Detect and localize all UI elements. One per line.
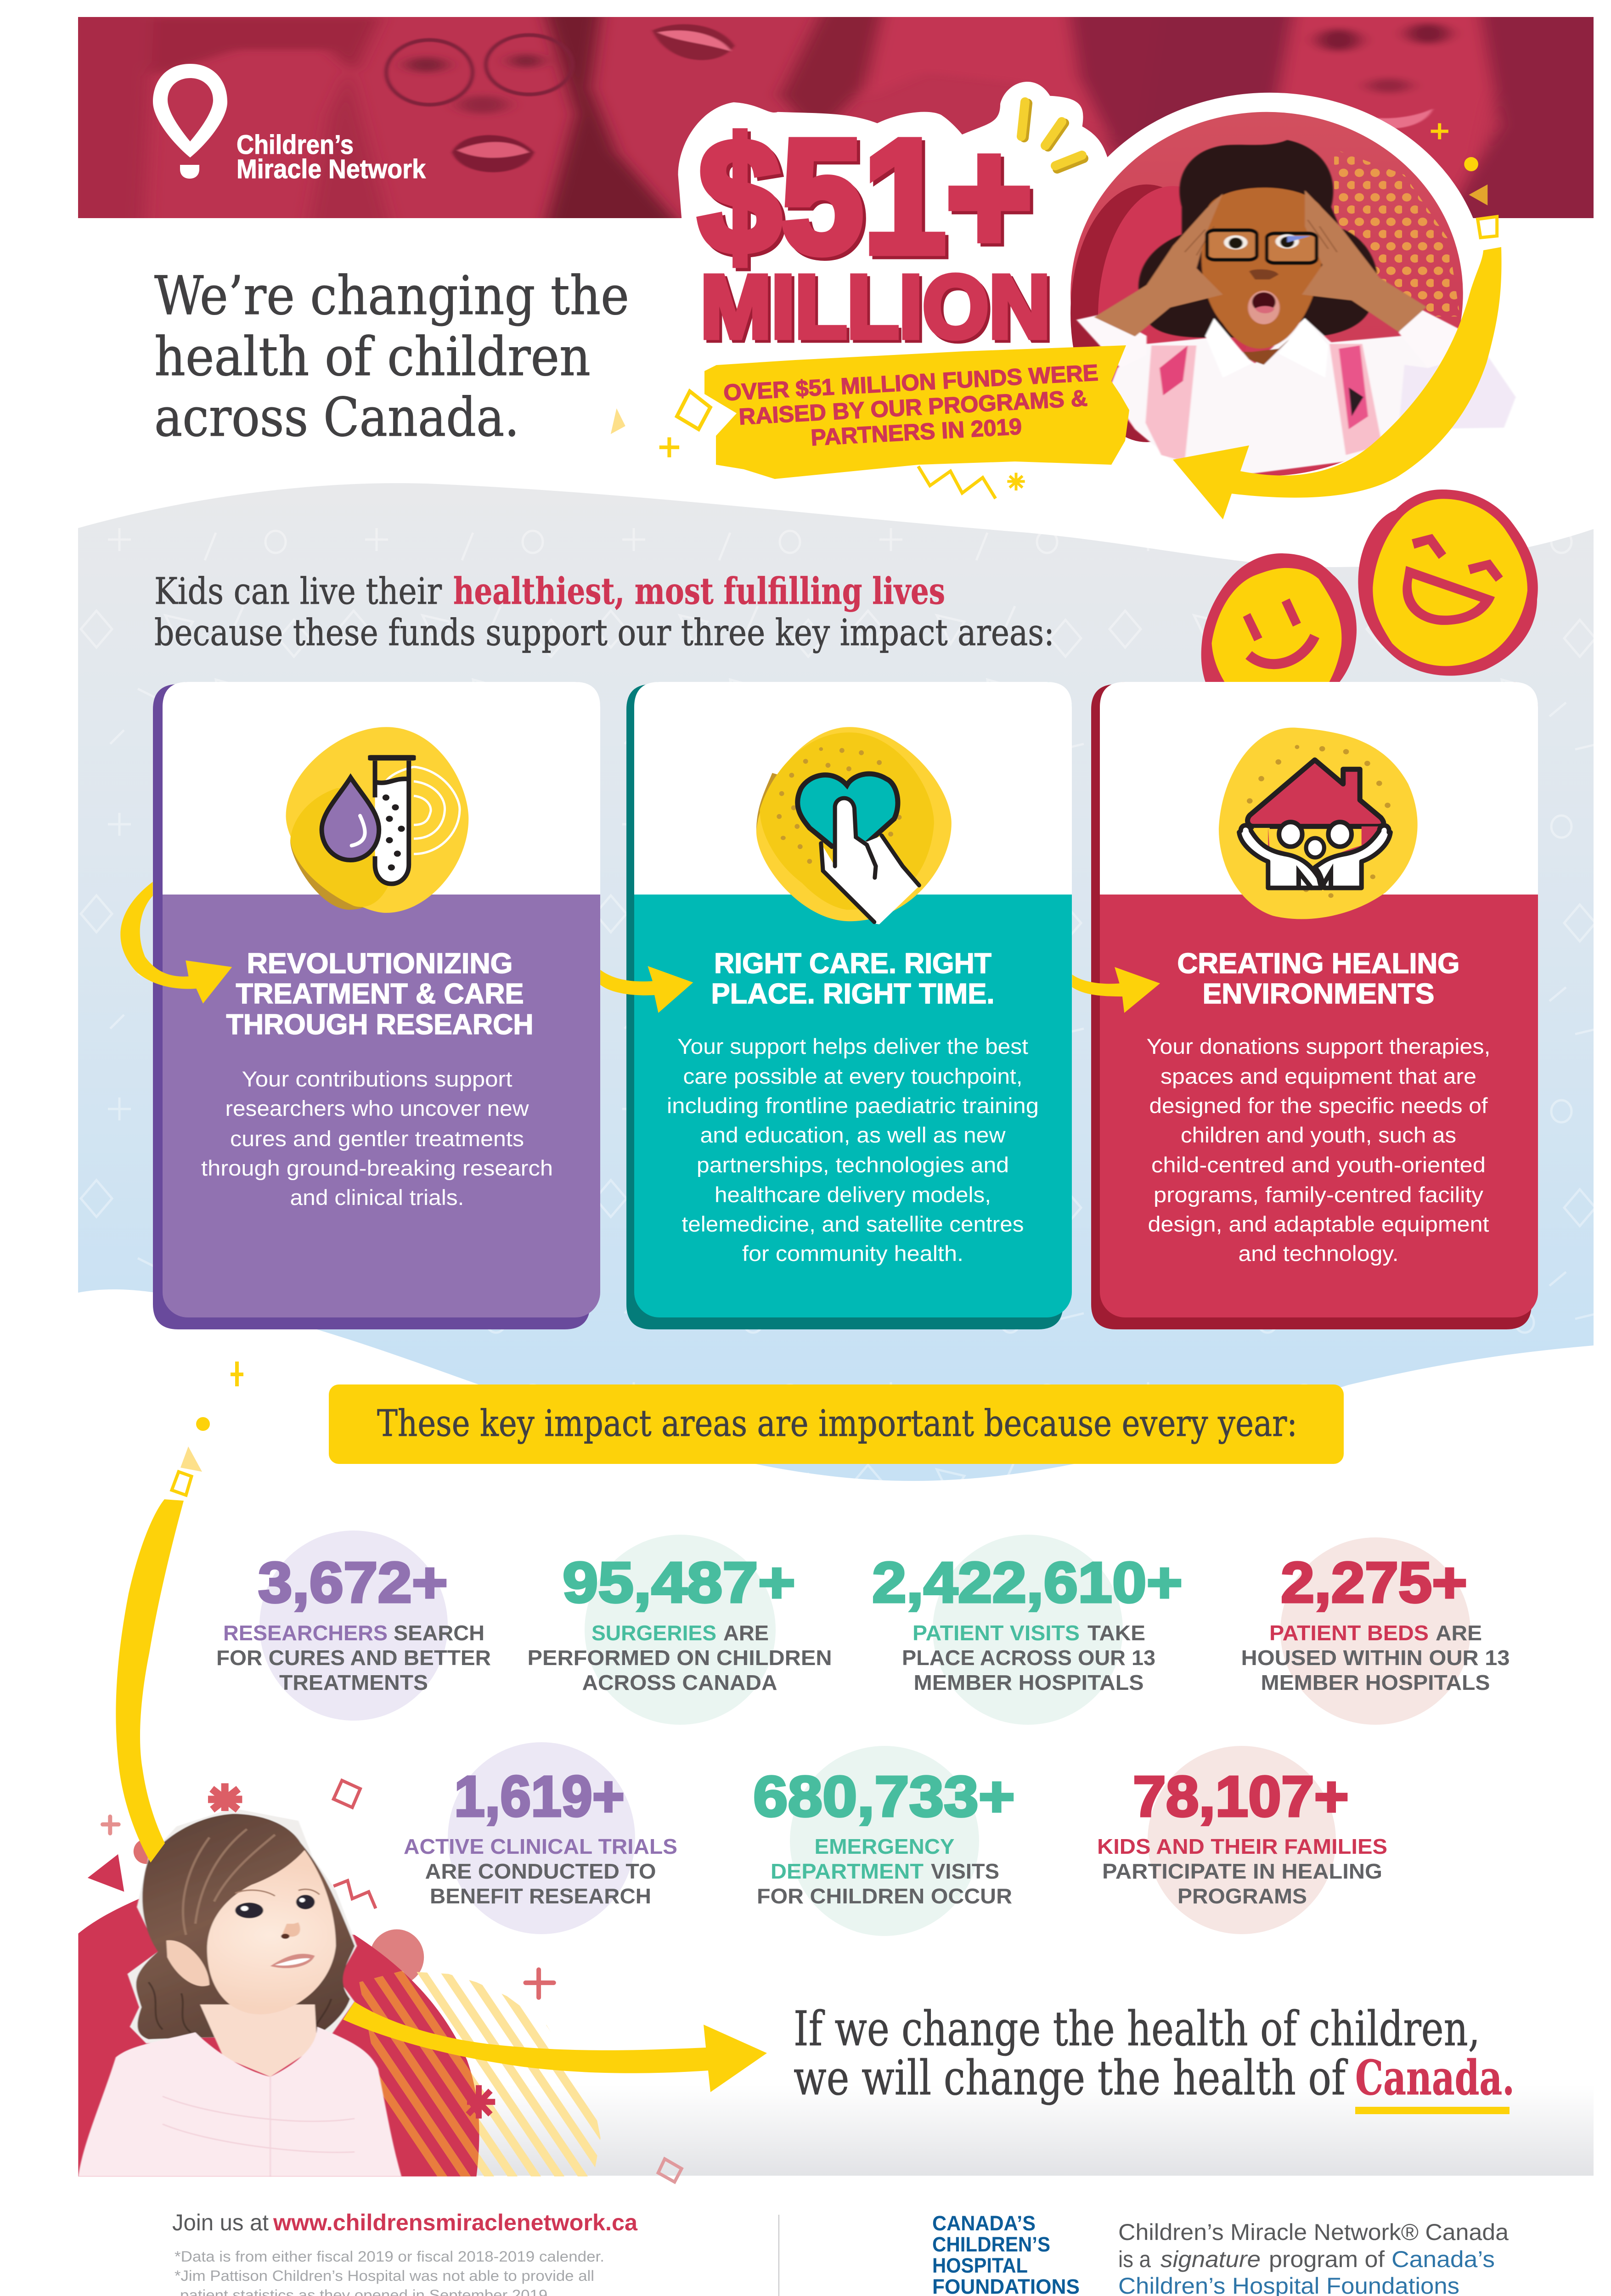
stat: patient beds: ARE	[1436, 1621, 1482, 1645]
collar	[1205, 318, 1252, 378]
decorations: red marks around toddler	[88, 1780, 682, 2182]
stat: patient visits: 2,422,610+	[872, 1551, 1183, 1615]
footer: signature program text: Canada’s	[1391, 2246, 1495, 2272]
arrow: long yellow curve from top of stats to toddler	[116, 1499, 184, 1863]
shirt	[1109, 318, 1431, 474]
toddler halo	[128, 1808, 357, 2043]
card body text: Your contributions support	[242, 1067, 513, 1091]
stat: researchers: RESEARCHERS	[223, 1621, 388, 1645]
footer: signature program text: is a	[1118, 2246, 1151, 2272]
big figure: $51+: $51+	[698, 106, 1032, 287]
card body text: Your support helps deliver the best	[677, 1034, 1028, 1058]
card heading: THROUGH RESEARCH	[226, 1009, 534, 1041]
stat: clinical trials: 1,619+	[454, 1765, 625, 1829]
glasses	[1207, 230, 1257, 260]
stat: emergency visits	[753, 1746, 1015, 1936]
big figure: MILLION: MILLION	[700, 257, 1050, 357]
footer: signature program text: Children’s Miracle Network® Canada	[1118, 2219, 1509, 2245]
card body text: designed for the specific needs of	[1149, 1093, 1488, 1118]
arrow: toddler to closing statement	[343, 2002, 767, 2092]
icon: house and family	[1219, 727, 1418, 919]
heading: We're changing the health	[154, 265, 629, 449]
face	[207, 1850, 336, 2015]
card body text: telemedicine, and satellite centres	[682, 1212, 1024, 1236]
callout: yellow brush with funds text: OVER $51 MILLION FUNDS WERE	[723, 360, 1099, 405]
smiley faces	[1201, 490, 1538, 705]
card heading: PLACE. RIGHT TIME.	[711, 978, 995, 1010]
arrow: curved arrow into card one	[120, 882, 232, 1003]
card body text: and clinical trials.	[290, 1185, 464, 1210]
stat: surgeries: 95,487+	[563, 1551, 795, 1615]
stat: kids and families: PARTICIPATE IN HEALING	[1102, 1859, 1382, 1883]
card body text: child-centred and youth-oriented	[1151, 1153, 1486, 1177]
card body text: researchers who uncover new	[225, 1096, 529, 1120]
card body text	[667, 1034, 1039, 1266]
card body text: healthcare delivery models,	[715, 1182, 991, 1207]
logo: Children's Miracle Network: Children’s	[237, 130, 354, 160]
impact panel background wave	[78, 483, 1594, 1481]
panel: card right care	[626, 682, 1072, 1329]
stat: patient visits: PATIENT VISITS	[913, 1621, 1080, 1645]
footer: join us: Join us at	[172, 2210, 269, 2235]
stat: clinical trials: ARE CONDUCTED TO	[425, 1859, 656, 1883]
stat: researchers: TREATMENTS	[279, 1671, 428, 1694]
footer: foundations logo	[932, 2212, 1080, 2296]
heading: We're changing the health: across Canada.	[154, 387, 519, 449]
stat: kids and families: KIDS AND THEIR FAMILIES	[1097, 1835, 1387, 1858]
hair	[136, 1814, 355, 2039]
mouth	[1248, 291, 1279, 324]
stat: patient beds: PATIENT BEDS	[1269, 1621, 1429, 1645]
sticker: white backing	[678, 82, 1487, 476]
stat: emergency visits: FOR CHILDREN OCCUR	[757, 1884, 1012, 1908]
face	[1201, 188, 1324, 349]
card body text	[201, 1067, 553, 1210]
stat: patient beds: HOUSED WITHIN OUR 13	[1241, 1646, 1510, 1670]
arrow: yellow curve around girl	[1173, 247, 1502, 519]
heading: We're changing the health: We’re changing the	[154, 265, 629, 327]
intro text: because these funds support our three key impact areas:	[154, 611, 1054, 654]
accent bars near $51+	[1021, 102, 1084, 169]
callout: yellow brush with funds text	[704, 345, 1129, 479]
eyes, nose and mouth	[235, 1902, 263, 1918]
stat: surgeries: SURGERIES	[591, 1621, 716, 1645]
intro text: healthiest, most fulfilling lives	[453, 569, 945, 613]
stat: patient visits: TAKE	[1087, 1621, 1145, 1645]
card body text: and technology.	[1238, 1241, 1399, 1266]
stat: kids and families: PROGRAMS	[1177, 1884, 1307, 1908]
hair	[1138, 140, 1378, 338]
illustration: surprised girl	[1070, 112, 1515, 476]
closing statement: we will change the health of	[794, 2050, 1348, 2106]
callout: yellow brush with funds text: RAISED BY OUR PROGRAMS &	[738, 385, 1088, 430]
logo: Children's Miracle Network: Miracle Network	[237, 154, 426, 184]
closing statement	[794, 2001, 1515, 2106]
logo: Children's Miracle Network	[153, 64, 426, 184]
footer: signature program text: program of	[1269, 2246, 1385, 2272]
footer: data notes	[175, 2248, 604, 2296]
stat: researchers	[216, 1531, 491, 1721]
decorations: yellow marks	[172, 1362, 243, 1495]
card body text: Your donations support therapies,	[1146, 1034, 1491, 1058]
card heading: TREATMENT & CARE	[236, 978, 524, 1010]
card heading: REVOLUTIONIZING	[247, 948, 513, 979]
stat: surgeries: ACROSS CANADA	[582, 1671, 777, 1694]
footer: signature program text	[1118, 2219, 1509, 2296]
stat: patient visits: PLACE ACROSS OUR 13	[902, 1646, 1155, 1670]
shirt	[78, 2027, 401, 2177]
stat: patient visits	[872, 1535, 1183, 1725]
card body text: cures and gentler treatments	[230, 1126, 524, 1151]
stat: patient visits: MEMBER HOSPITALS	[914, 1671, 1143, 1694]
underline accent	[1355, 2107, 1510, 2114]
illustration: toddler with shapes	[78, 1809, 601, 2177]
stat: emergency visits: 680,733+	[753, 1765, 1015, 1829]
stat: kids and families	[1097, 1746, 1387, 1934]
footer: data notes: *Data is from either fiscal 2019 or fiscal 2018-2019 calender.	[175, 2248, 604, 2265]
intro text	[154, 569, 1054, 654]
stat: emergency visits: DEPARTMENT	[771, 1859, 924, 1883]
panel: card healing environments	[1091, 682, 1538, 1329]
card body text: care possible at every touchpoint,	[683, 1064, 1022, 1088]
stat: researchers: 3,672+	[258, 1551, 448, 1615]
card body text: through ground-breaking research	[201, 1156, 553, 1180]
stat: surgeries: ARE	[723, 1621, 769, 1645]
stat: researchers: FOR CURES AND BETTER	[216, 1646, 491, 1670]
callout: yellow brush with funds text: PARTNERS IN 2019	[810, 413, 1022, 450]
card body text: and education, as well as new	[700, 1123, 1006, 1147]
footer: foundations logo: CHILDREN’S	[932, 2233, 1050, 2256]
card body text	[1146, 1034, 1491, 1266]
ear	[166, 1940, 209, 1986]
stat: emergency visits: VISITS	[931, 1859, 999, 1883]
arrow: card two to card three	[1072, 967, 1160, 1013]
card body text: spaces and equipment that are	[1160, 1064, 1476, 1088]
stat: clinical trials: BENEFIT RESEARCH	[430, 1884, 651, 1908]
stat: clinical trials	[404, 1742, 677, 1934]
card body text: partnerships, technologies and	[697, 1153, 1009, 1177]
card body text: design, and adaptable equipment	[1148, 1212, 1489, 1236]
arrow: card one to card two	[600, 966, 693, 1013]
panel: card research	[153, 682, 600, 1329]
card heading: CREATING HEALING	[1177, 948, 1459, 979]
footer: foundations logo: CANADA’S	[932, 2212, 1036, 2235]
neck	[200, 2004, 317, 2077]
banner: key impact areas statement: These key impact areas are important because every year:	[377, 1402, 1297, 1445]
stat: patient beds	[1241, 1537, 1510, 1725]
stat: researchers: SEARCH	[394, 1621, 484, 1645]
decorations around girl	[611, 123, 1497, 499]
banner: key impact areas statement	[329, 1384, 1344, 1464]
card body text: children and youth, such as	[1181, 1123, 1456, 1147]
bottom gradient band	[78, 2085, 1594, 2176]
footer: data notes: *Jim Pattison Children’s Hospital was not able to provide all	[175, 2268, 594, 2284]
icon: drop and test tube	[286, 727, 468, 913]
heading: We're changing the health: health of children	[154, 326, 591, 388]
stat: surgeries	[527, 1535, 832, 1725]
stat: emergency visits: EMERGENCY	[815, 1835, 954, 1858]
intro text: Kids can live their	[154, 570, 442, 613]
footer divider	[778, 2215, 779, 2296]
card heading	[226, 948, 534, 1041]
hands	[1094, 193, 1223, 337]
stat: kids and families: 78,107+	[1133, 1765, 1349, 1829]
card body text: for community health.	[742, 1241, 963, 1266]
card heading	[1177, 948, 1459, 1010]
footer: join us: www.childrensmiraclenetwork.ca	[273, 2210, 638, 2235]
icon: heart and hand	[756, 727, 952, 924]
stat: surgeries: PERFORMED ON CHILDREN	[527, 1646, 832, 1670]
footer: foundations logo: HOSPITAL	[932, 2254, 1028, 2277]
stat: patient beds: 2,275+	[1281, 1551, 1467, 1615]
card heading: ENVIRONMENTS	[1202, 978, 1435, 1010]
footer: signature program text: signature	[1160, 2246, 1261, 2272]
card heading: RIGHT CARE. RIGHT	[714, 948, 991, 979]
card body text: including frontline paediatric training	[667, 1093, 1039, 1118]
banner: children's faces	[62, 11, 1611, 228]
card body text: programs, family-centred facility	[1154, 1182, 1484, 1207]
backpack straps	[1145, 345, 1196, 461]
closing statement: Canada.	[1355, 2049, 1515, 2106]
stat: clinical trials: ACTIVE CLINICAL TRIALS	[404, 1835, 677, 1858]
stat: patient beds: MEMBER HOSPITALS	[1261, 1671, 1490, 1694]
card heading	[711, 948, 995, 1010]
